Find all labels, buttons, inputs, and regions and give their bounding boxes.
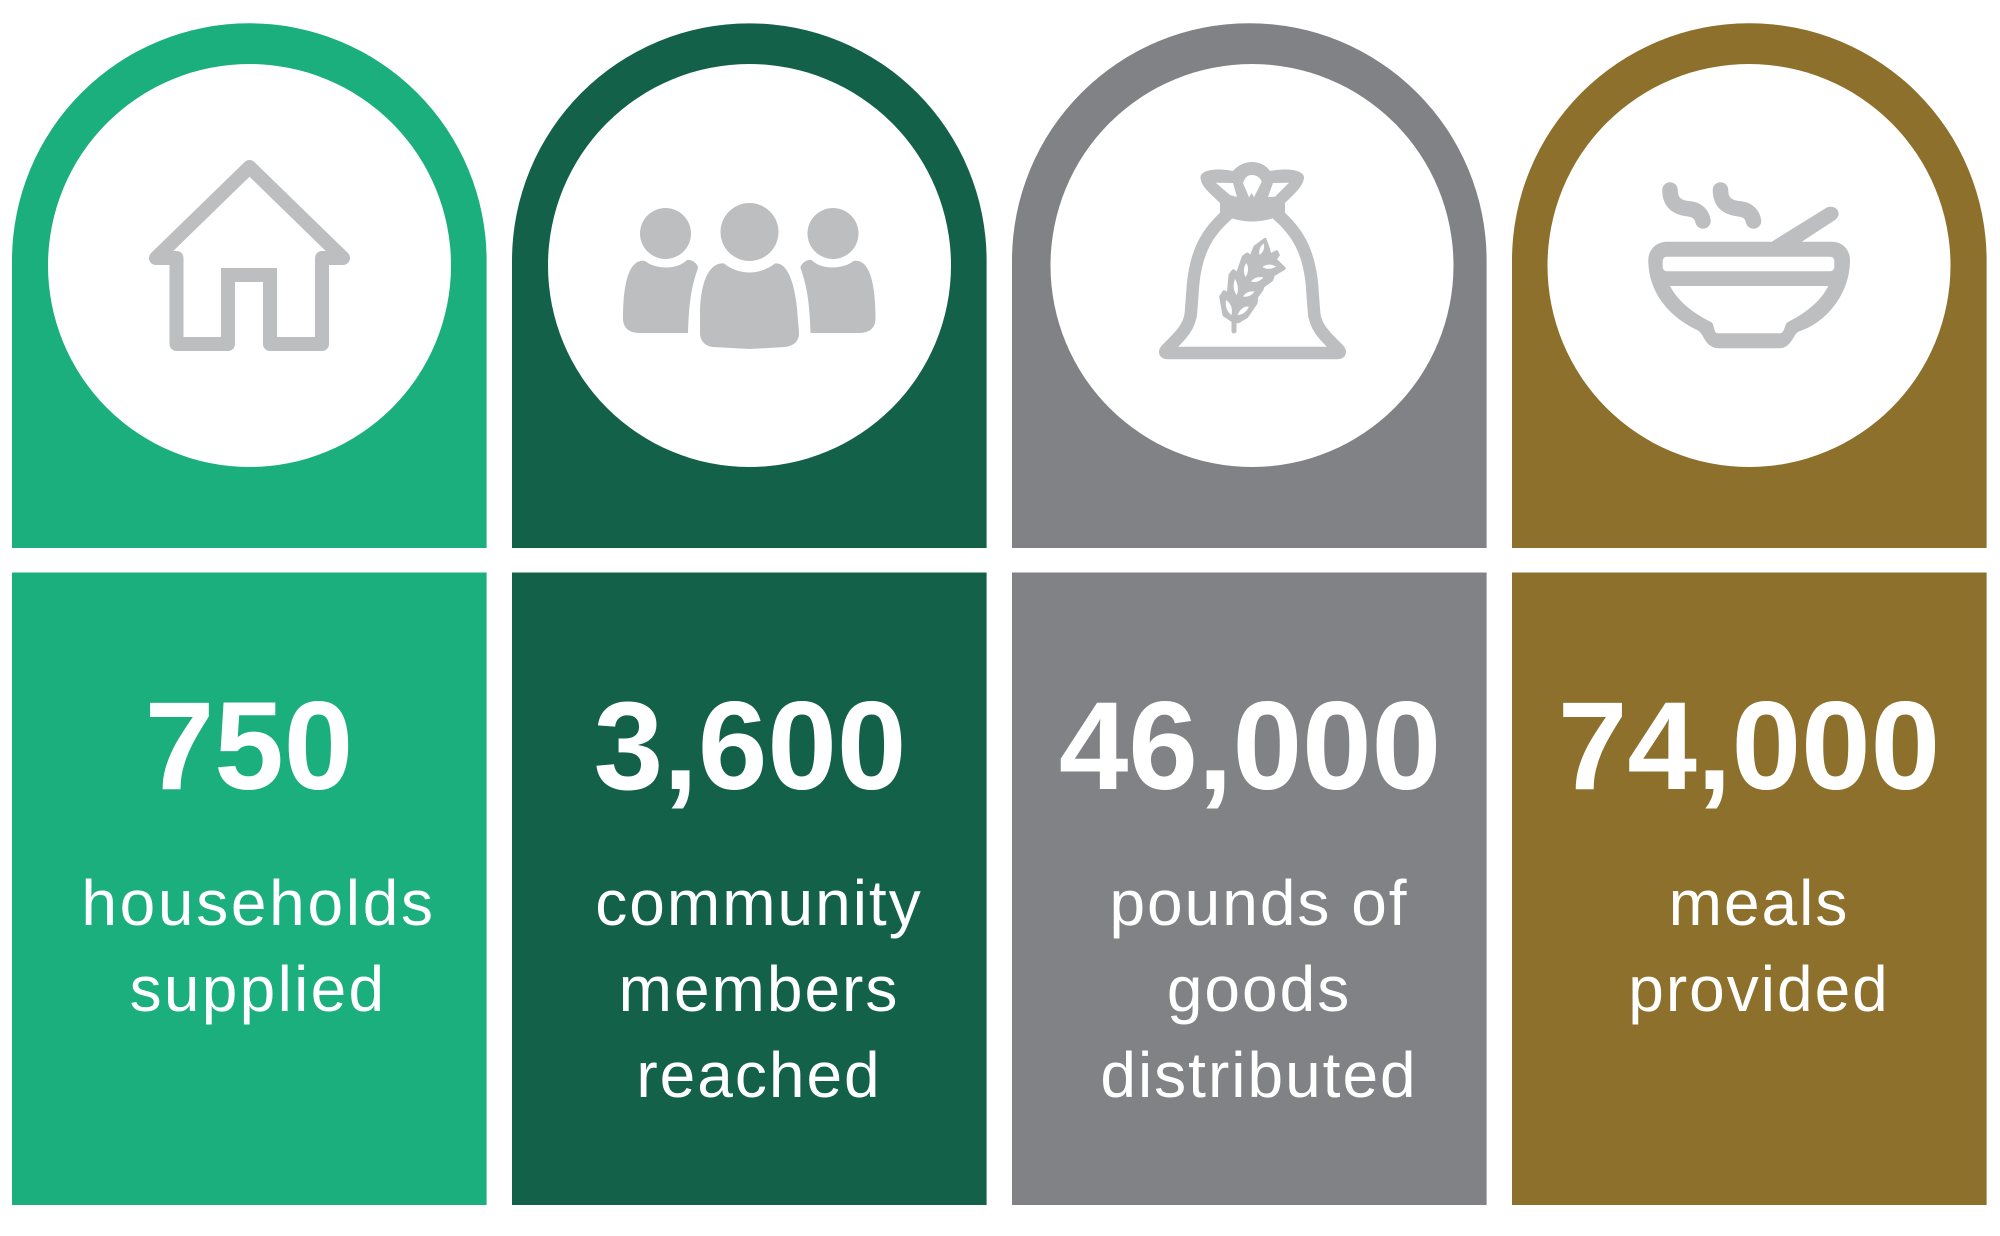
icon: grain sack [1165, 162, 1340, 353]
arch header [512, 23, 987, 548]
icon circle [1050, 64, 1454, 467]
panel: meals provided [1512, 23, 1987, 1205]
label: provided [1628, 953, 1890, 1025]
label: reached [636, 1039, 882, 1111]
icon: three people [623, 203, 876, 349]
panel: community members reached [512, 23, 987, 1205]
label: distributed [1100, 1039, 1418, 1111]
icon circle [548, 64, 951, 467]
icon circle [1548, 64, 1950, 467]
arch header [1012, 23, 1487, 548]
panel: households supplied [12, 23, 487, 1205]
icon: steaming bowl [1648, 190, 1850, 348]
number: 46,000 [1059, 677, 1441, 816]
number: 74,000 [1558, 677, 1940, 816]
icon: house [156, 167, 343, 344]
arch header [1512, 23, 1987, 548]
label: meals [1669, 867, 1849, 939]
label: supplied [130, 953, 386, 1025]
stat block [12, 572, 487, 1205]
number: 3,600 [594, 677, 906, 816]
label: households [81, 867, 436, 939]
icon circle [48, 64, 451, 467]
label: members [619, 953, 899, 1025]
panel: pounds of goods distributed [1012, 23, 1487, 1205]
number: 750 [145, 677, 353, 816]
arch header [12, 23, 487, 548]
label: pounds of [1109, 867, 1409, 939]
label: goods [1167, 953, 1351, 1025]
stat block [1012, 572, 1487, 1205]
stat block [512, 572, 987, 1205]
stat block [1512, 572, 1987, 1205]
label: community [595, 867, 923, 939]
